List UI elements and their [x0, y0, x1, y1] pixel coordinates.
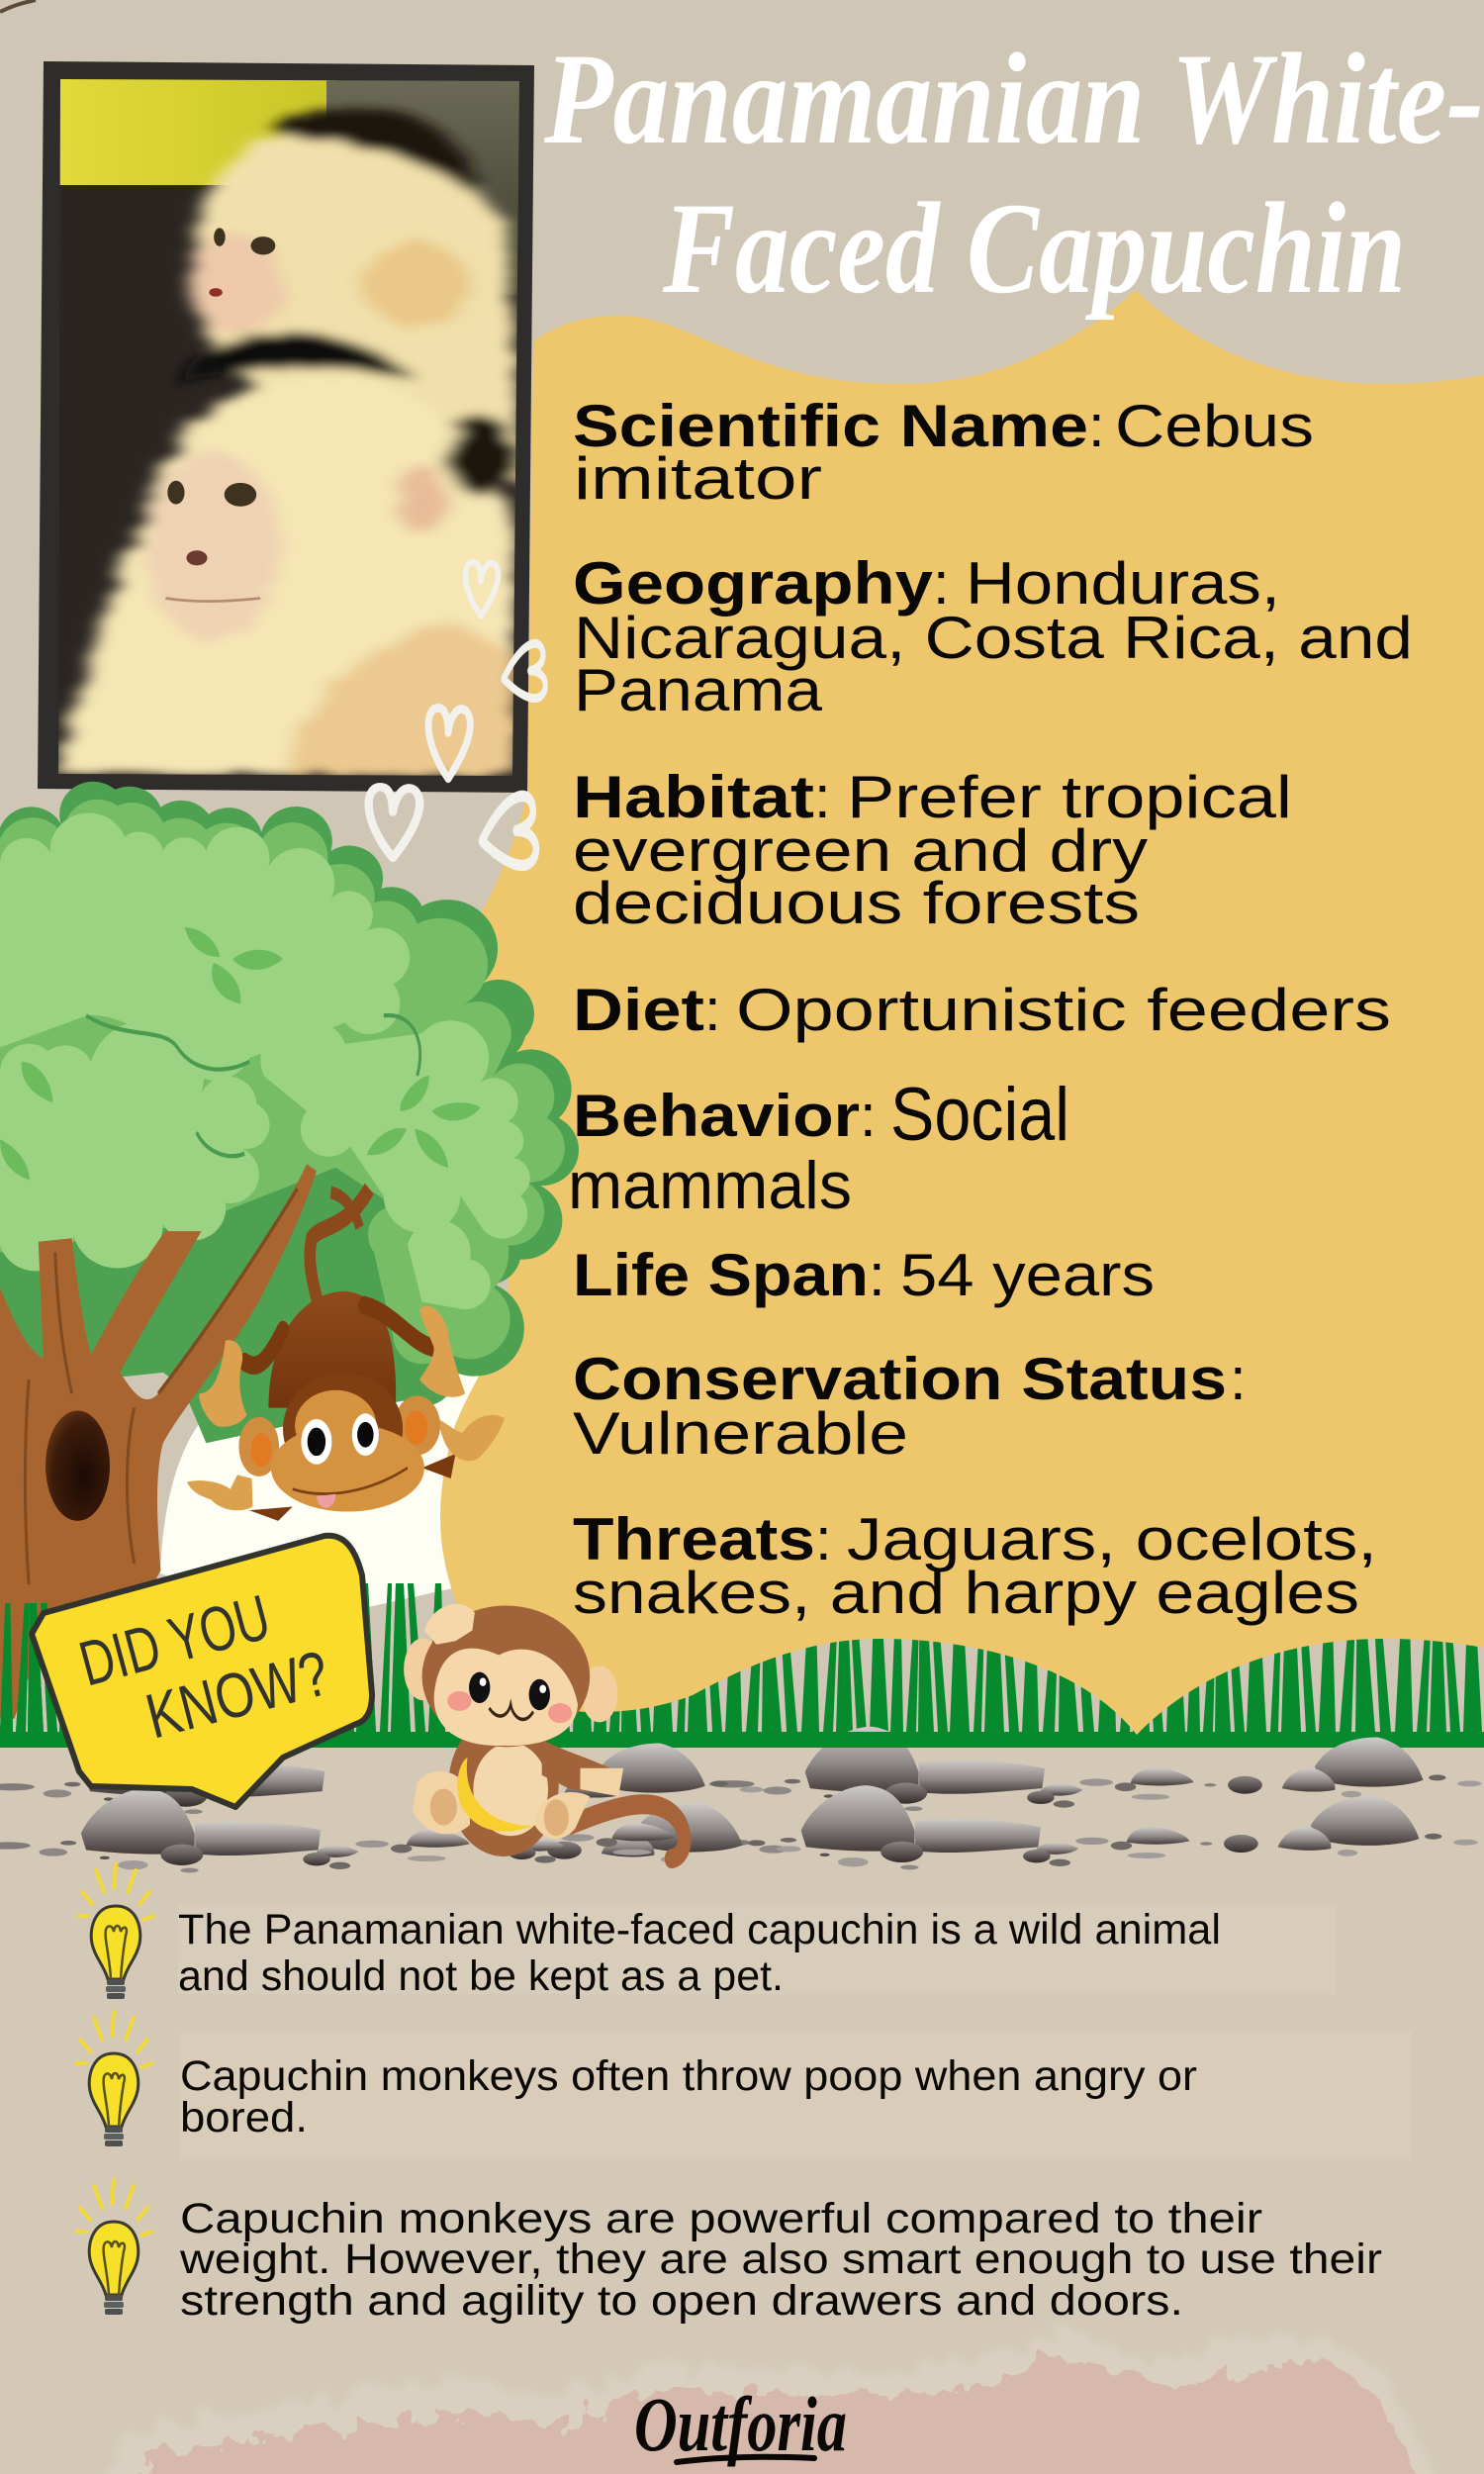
grass in front of tree [0, 1583, 475, 1748]
yellow facts panel [440, 290, 1484, 1735]
canopy shadow layer [0, 782, 579, 1443]
fact: diet [573, 977, 1391, 1043]
fact: geography: Geography [573, 550, 934, 617]
fact: geography: Honduras, [966, 550, 1280, 617]
fact: scientific name: : [1088, 393, 1105, 459]
fact: scientific name: imitator [574, 445, 822, 512]
tree with hanging monkey [0, 782, 579, 1719]
white backdrop behind hanging monkey [160, 1306, 505, 1623]
hearts [369, 562, 547, 877]
fact: life span: 54 years [900, 1242, 1155, 1308]
fact 1 text: and should not be kept as a pet. [178, 1952, 784, 2000]
fact: habitat: Prefer tropical [847, 764, 1292, 830]
bulb icon 1 [78, 1864, 153, 1999]
hanging monkey [187, 1189, 505, 1521]
fact 1 text [178, 1906, 1221, 2000]
fact: diet: Diet [573, 977, 704, 1043]
canopy folds [86, 1015, 420, 1156]
fact: conservation status: : [1230, 1346, 1247, 1412]
fact 3 text: weight. However, they are also smart enough to use their [179, 2236, 1382, 2283]
fact: conservation status [573, 1346, 1247, 1467]
fact: conservation status: Conservation Status [573, 1346, 1227, 1412]
rocks behind band [0, 1727, 1045, 1814]
fact 2 text [180, 2052, 1197, 2141]
fact: threats: Jaguars, ocelots, [847, 1506, 1377, 1572]
grass behind panel [0, 1583, 1484, 1732]
fact: threats: : [815, 1506, 832, 1572]
torn paper footer [69, 2328, 1464, 2474]
fact: habitat: Habitat [573, 764, 814, 830]
fact 3 text: Capuchin monkeys are powerful compared to their [180, 2195, 1262, 2242]
fact 2 text: Capuchin monkeys often throw poop when angry or [180, 2052, 1197, 2100]
fact: behavior: Social [890, 1073, 1069, 1157]
fact: diet: Oportunistic feeders [736, 977, 1391, 1043]
leaves [0, 927, 481, 1181]
fact: life span: Life Span [573, 1242, 869, 1308]
tree hollow [46, 1410, 110, 1521]
fact: geography: Panama [574, 657, 823, 723]
fact: behavior: : [860, 1083, 877, 1149]
light green layer [0, 813, 530, 1309]
fact: geography [573, 550, 1413, 723]
fact: behavior [568, 1073, 1069, 1223]
fact 3 text: strength and agility to open drawers and doors. [180, 2277, 1183, 2325]
fact: threats: Threats [573, 1506, 815, 1572]
fact: habitat: evergreen and dry [573, 817, 1148, 884]
fact: threats: snakes, and harpy eagles [573, 1560, 1359, 1626]
fact: scientific name: Cebus [1115, 393, 1314, 459]
bulb icon 3 [76, 2180, 151, 2315]
fact: behavior: Behavior [573, 1083, 860, 1149]
fact: scientific name [573, 393, 1314, 512]
mid green layer [0, 800, 565, 1253]
fact 1 text: The Panamanian white-faced capuchin is a wild animal [178, 1906, 1221, 1953]
fact: geography: Nicaragua, Costa Rica, and [574, 605, 1413, 671]
Outforia logo: Outforia [634, 2381, 847, 2467]
fact: diet: : [704, 977, 721, 1043]
fact: threats [573, 1506, 1377, 1626]
lower right canopy cluster [368, 1202, 510, 1364]
photo of two capuchins [38, 61, 539, 793]
fact: habitat: deciduous forests [573, 870, 1140, 936]
fact: habitat: : [814, 764, 831, 830]
fact: life span: : [869, 1242, 885, 1308]
trunk [0, 1164, 317, 1719]
fact: behavior: mammals [568, 1148, 852, 1223]
fact 2 text: bored. [180, 2094, 308, 2141]
fact: scientific name: Scientific Name [573, 393, 1088, 459]
fact: conservation status: Vulnerable [573, 1400, 908, 1467]
sitting monkey with banana [404, 1604, 685, 1858]
fact: geography: : [933, 550, 950, 617]
fact 3 text [179, 2195, 1382, 2325]
title [543, 26, 1484, 321]
rocks and pebbles on ground [0, 1737, 1482, 1872]
did you know callout: KNOW? [139, 1637, 336, 1753]
green grass band [0, 1732, 1484, 1748]
lighter text strips [0, 1748, 1484, 2474]
bulb icon 2 [76, 2012, 151, 2146]
fact: habitat [573, 764, 1292, 936]
twig corner [0, 0, 36, 12]
did you know callout [32, 1536, 372, 1807]
fact: life span [573, 1242, 1155, 1308]
did you know callout: DID YOU [72, 1581, 277, 1700]
